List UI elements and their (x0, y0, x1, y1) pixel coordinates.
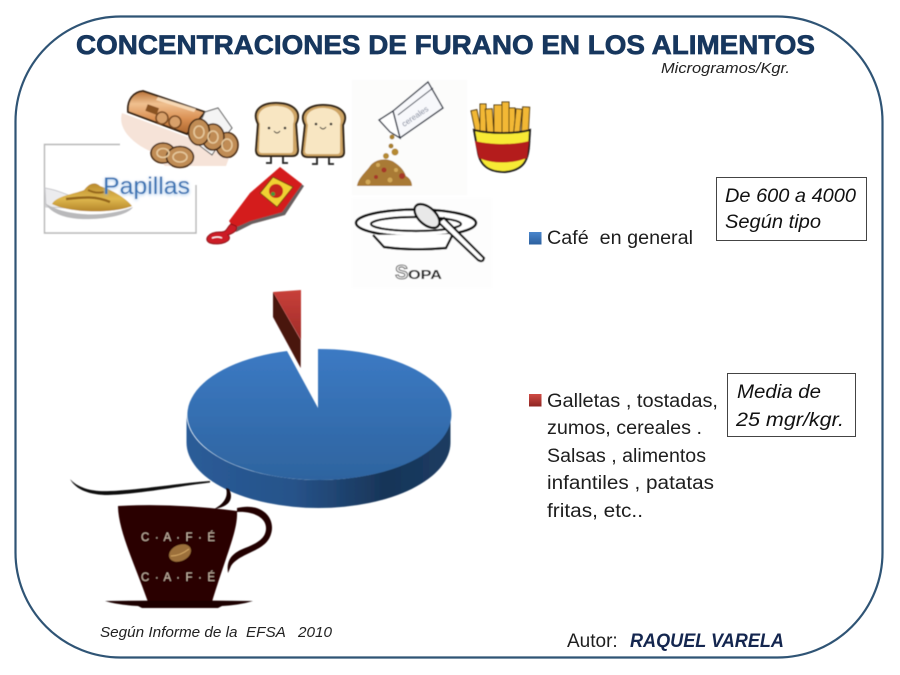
legend label: other foods: infantiles , patatas (547, 473, 714, 494)
author credit: RAQUEL VARELA (630, 631, 784, 652)
author credit: Autor: (567, 631, 618, 652)
icon: papillas card (44, 144, 196, 233)
legend: other foods (529, 391, 718, 522)
subtitle: units: Microgramos/Kgr. (661, 61, 790, 77)
icon: french fries (471, 102, 530, 172)
icon: ketchup bottle (207, 167, 304, 244)
icon: soup bowl (352, 198, 492, 288)
icon: papillas card: Papillas (103, 174, 190, 201)
legend label: other foods: Salsas , alimentos (547, 446, 706, 467)
legend swatch: red (529, 394, 542, 406)
callout: average: 25 mgr/kgr. (735, 410, 844, 431)
callout: coffee range: De 600 a 4000 (725, 186, 856, 207)
icon: soup bowl: S (395, 262, 408, 284)
callout: coffee range (716, 178, 866, 240)
legend label: other foods (547, 391, 718, 522)
icon: coffee cup: C · A · F · É (141, 531, 215, 544)
pie: exploded red slice (273, 290, 301, 368)
icon: coffee cup: C · A · F · É (141, 571, 215, 584)
icon: cereal box and pile (352, 80, 467, 195)
legend: coffee (529, 228, 693, 249)
title: CONCENTRACIONES DE FURANO EN LOS ALIMENTOS (76, 30, 815, 60)
pie: side wall (186, 414, 451, 508)
icon: toast slices (256, 103, 345, 164)
source note: Según Informe de la EFSA 2010 (100, 624, 333, 641)
callout: average: Media de (737, 382, 821, 403)
icon: soup bowl: OPA (408, 267, 443, 282)
callout: average (728, 374, 856, 436)
icon: coffee cup (70, 479, 272, 608)
pie: coffee slice (187, 349, 451, 480)
pie chart (186, 290, 451, 508)
icon: cookie roll (121, 91, 238, 168)
legend label: coffee: Café en general (547, 228, 693, 249)
legend label: other foods: zumos, cereales . (547, 418, 702, 439)
legend swatch: blue (529, 232, 542, 244)
legend label: other foods: fritas, etc.. (547, 501, 643, 522)
callout: coffee range: Según tipo (725, 212, 821, 233)
legend label: other foods: Galletas , tostadas, (547, 391, 718, 412)
icon: cereal box and pile: cereales (400, 104, 430, 129)
icon: papillas card: Papillas (103, 173, 190, 200)
